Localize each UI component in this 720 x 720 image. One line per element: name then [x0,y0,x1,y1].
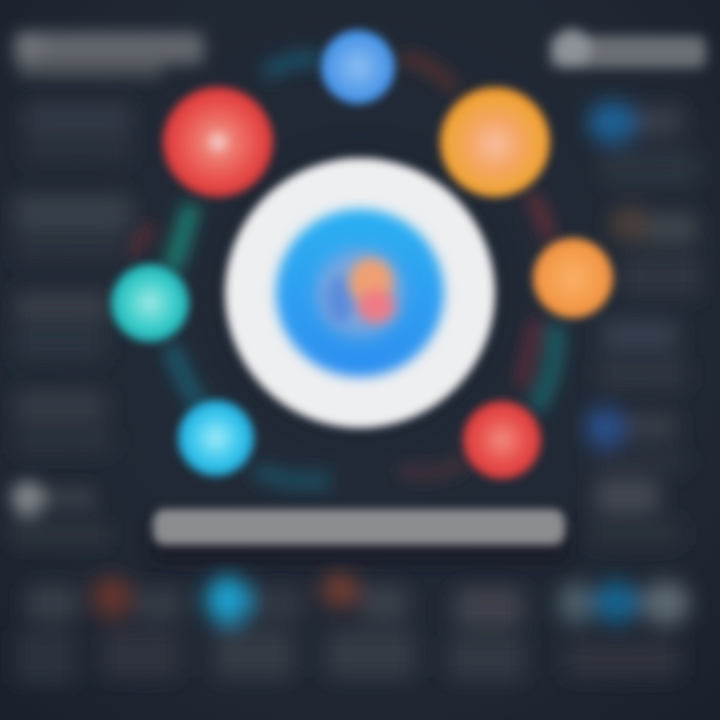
text block: left 1 detail [24,140,134,162]
node: red top left [163,87,273,197]
panel: right list [585,101,702,546]
column 4 icon [322,573,358,607]
column 6 icon right [642,581,690,625]
hub: shadow ring [214,147,506,439]
text block: right 2 detail [622,255,702,297]
column 1 text [16,630,76,684]
text block: right 3 [602,320,678,350]
column 5 text [449,635,525,680]
banner fill [153,509,565,545]
icon: left bottom dot [10,481,110,548]
hub: blue disc [276,209,444,377]
column 3 text [215,630,293,678]
text block: right 5 detail [587,520,682,546]
column 3 icon [206,576,250,624]
icon: right blue 2 [585,407,625,447]
column 6 text [565,640,681,678]
text block: left 3 detail [14,328,106,360]
connector lines [130,59,556,481]
hub: inner ring [316,249,404,337]
text block: left 2 [14,195,132,231]
column 1 heading [26,586,78,620]
text block: left 2 detail [14,235,126,261]
banner bar [150,509,570,566]
title: top right [550,29,706,68]
node: teal left [111,264,189,342]
text block: right 1 detail [602,150,698,186]
panel: left text blocks [14,102,134,454]
column 6 icon left [558,582,594,624]
text block: left 4 detail [14,428,114,454]
banner shadow [150,516,570,566]
text block: right 3 detail [597,358,687,390]
node: red bottom right [463,401,541,479]
text block: left 3 [14,292,110,322]
text block: right 2 [645,213,697,243]
node: blue top [321,30,395,104]
column 6 icon mid [593,581,641,623]
column 2 icon [92,576,132,618]
panel: bottom columns [16,573,690,684]
column 5 heading [455,588,523,626]
text block: right 4 detail [592,450,687,472]
column 2 heading [136,588,184,620]
column 3 heading [253,588,303,620]
node: amber top right [440,87,550,197]
text block: left 1 [24,102,132,136]
column 2 text [102,630,180,678]
hub: globe blue side [326,276,354,324]
node: orange right [533,238,613,318]
text block: left 4 [14,390,106,422]
column 4 heading [360,586,408,620]
title: top left [14,32,204,78]
hub: central target [225,158,495,428]
text block: right 5 [595,480,659,512]
text block: right 4 [625,413,677,439]
hub: white ring [225,158,495,428]
column 4 text [327,630,415,678]
node: cyan bottom left [178,400,254,476]
text block: right 1 [635,106,683,136]
icon: right blue 1 [588,101,636,143]
hub: globe orange side [349,258,395,323]
icon: right brown [610,206,650,242]
